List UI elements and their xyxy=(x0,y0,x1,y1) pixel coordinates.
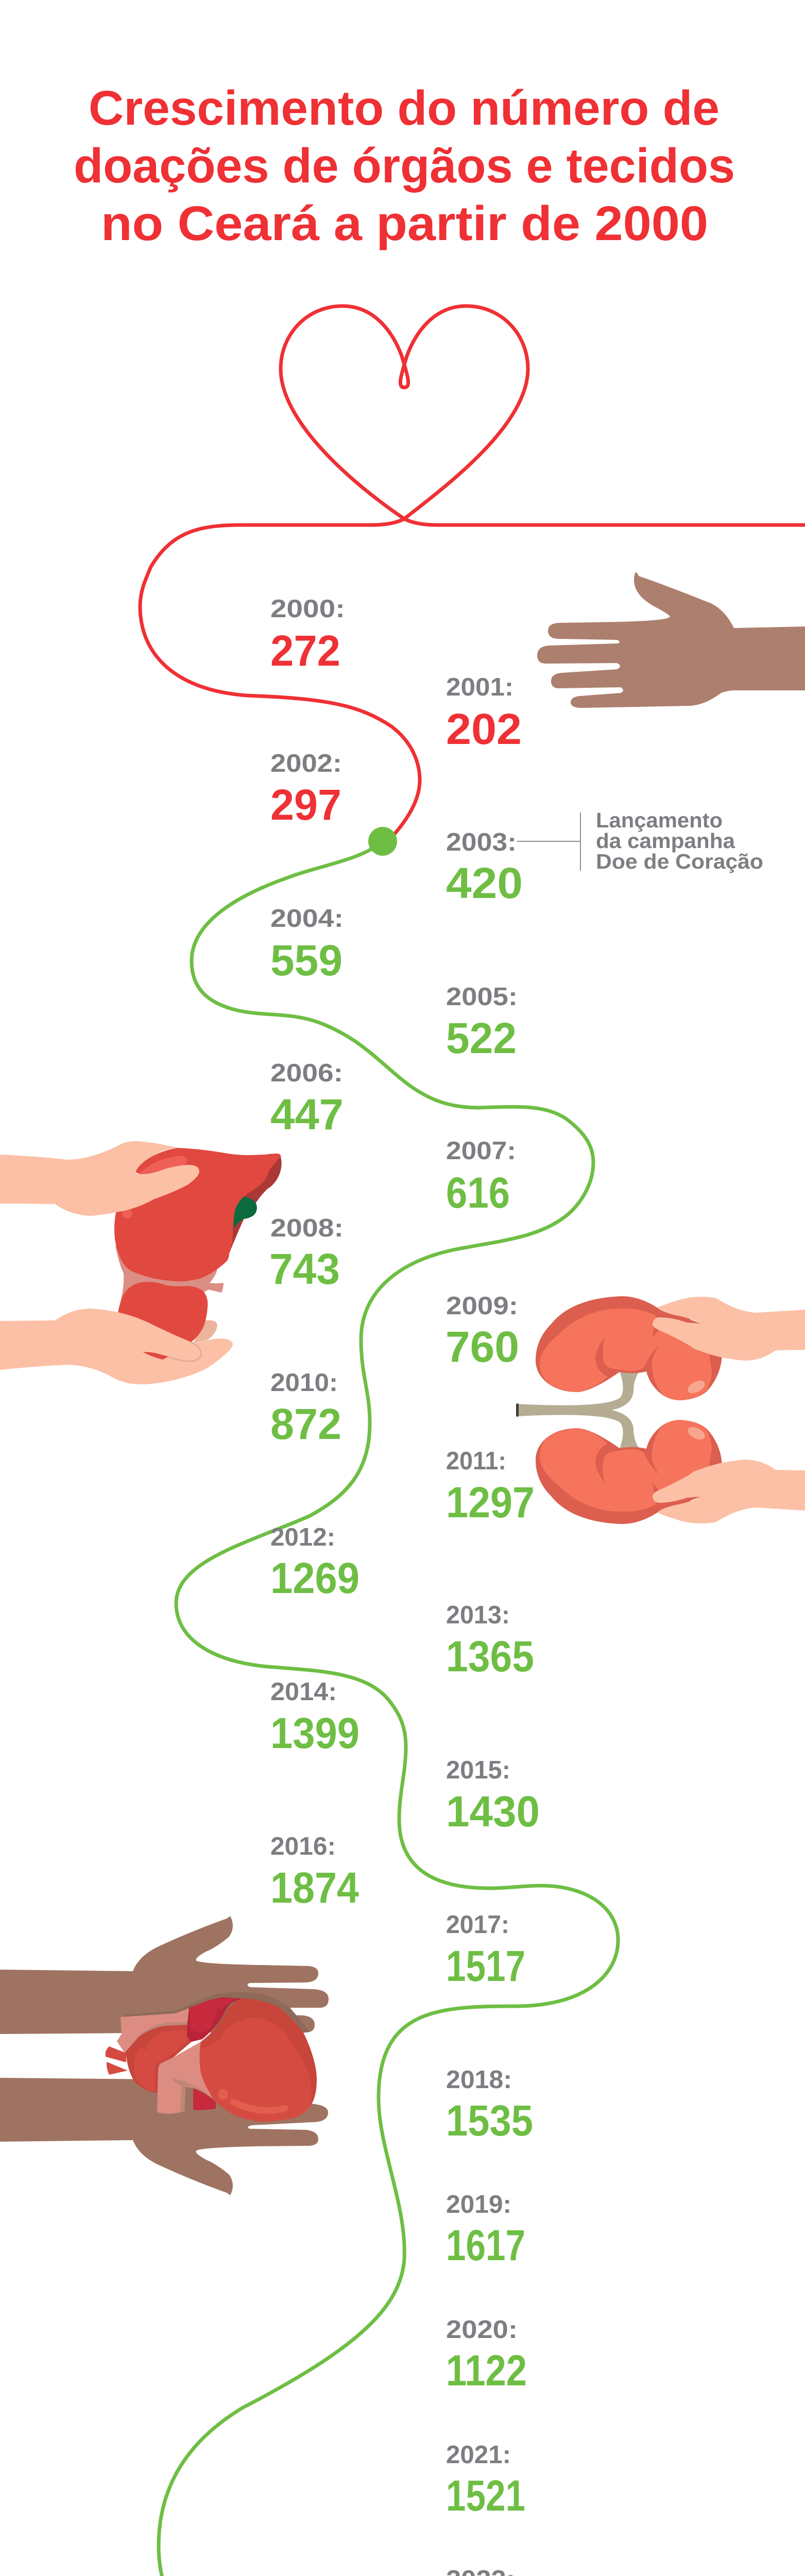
2007 xyxy=(446,1137,516,1217)
2017 xyxy=(446,1911,525,1990)
2016 xyxy=(270,1833,359,1912)
2011: 2011: xyxy=(446,1447,506,1475)
2010: 2010: xyxy=(270,1369,338,1397)
heart organ xyxy=(106,1997,317,2122)
2020 xyxy=(446,2316,527,2395)
2010 xyxy=(270,1369,341,1448)
2004: 2004: xyxy=(270,905,344,933)
2017: 2017: xyxy=(446,1911,509,1939)
2011 xyxy=(446,1447,535,1527)
2007: 616 xyxy=(446,1168,510,1217)
red heart ribbon line xyxy=(140,306,805,835)
2005 xyxy=(446,983,518,1062)
2015: 1430 xyxy=(446,1787,540,1836)
2005: 522 xyxy=(446,1014,517,1062)
2003 xyxy=(446,828,523,907)
lower kidney xyxy=(536,1420,722,1524)
2016: 2016: xyxy=(270,1833,336,1860)
icon: hands holding kidneys xyxy=(516,1296,805,1524)
upper hand xyxy=(0,1916,329,2034)
callout: campanha Doe de Coração xyxy=(517,808,763,873)
lower hand xyxy=(653,1460,805,1523)
callout: campanha Doe de Coração: Lançamento xyxy=(596,808,723,832)
2015 xyxy=(446,1756,540,1836)
2013 xyxy=(446,1601,534,1681)
2021 xyxy=(446,2441,525,2520)
2009 xyxy=(446,1292,519,1371)
title: no Ceará a partir de 2000 xyxy=(101,196,708,251)
2003: 420 xyxy=(446,859,523,907)
2013: 2013: xyxy=(446,1601,510,1629)
2000: 272 xyxy=(270,626,340,675)
2004 xyxy=(270,905,344,985)
2012: 1269 xyxy=(270,1554,359,1602)
2000 xyxy=(270,595,345,675)
title: doações de órgãos e tecidos xyxy=(74,139,735,193)
icon: hands holding heart xyxy=(0,1916,329,2195)
icon: hands holding liver xyxy=(0,1141,282,1384)
2003: 2003: xyxy=(446,828,517,856)
2004: 559 xyxy=(270,936,342,985)
callout: campanha Doe de Coração: Doe de Coração xyxy=(596,850,763,873)
icon: open hand top right xyxy=(537,572,805,708)
2005: 2005: xyxy=(446,983,518,1011)
green dot: campaign start xyxy=(368,827,397,856)
title: Crescimento do número de xyxy=(89,81,720,135)
2016: 1874 xyxy=(270,1863,359,1912)
2008 xyxy=(269,1214,344,1293)
lower hand xyxy=(0,2078,328,2195)
2014: 2014: xyxy=(270,1678,337,1706)
2019 xyxy=(446,2191,525,2269)
2015: 2015: xyxy=(446,1756,510,1784)
title xyxy=(74,81,735,251)
2002: 2002: xyxy=(270,750,342,777)
2019: 2019: xyxy=(446,2191,511,2218)
2006: 447 xyxy=(270,1090,344,1139)
2017: 1517 xyxy=(446,1942,525,1990)
2018 xyxy=(446,2066,533,2145)
2007: 2007: xyxy=(446,1137,516,1165)
2013: 1365 xyxy=(446,1632,534,1681)
2021: 2021: xyxy=(446,2441,511,2469)
2019: 1617 xyxy=(446,2221,525,2269)
2012: 2012: xyxy=(270,1523,335,1551)
2002: 297 xyxy=(270,781,341,829)
2018: 2018: xyxy=(446,2066,512,2094)
callout: campanha Doe de Coração: da campanha xyxy=(596,829,735,853)
2008: 2008: xyxy=(270,1214,344,1242)
2001: 202 xyxy=(446,705,522,753)
2006 xyxy=(270,1059,344,1139)
upper hand xyxy=(653,1297,805,1361)
2008: 743 xyxy=(269,1245,340,1293)
2010: 872 xyxy=(270,1400,341,1448)
green timeline line xyxy=(159,841,618,2576)
2018: 1535 xyxy=(446,2096,533,2145)
2009: 760 xyxy=(446,1323,519,1371)
2009: 2009: xyxy=(446,1292,518,1320)
2014: 1399 xyxy=(270,1709,359,1757)
2021: 1521 xyxy=(446,2471,525,2520)
2006: 2006: xyxy=(270,1059,343,1087)
2014 xyxy=(270,1678,359,1757)
2000: 2000: xyxy=(270,595,345,623)
2020: 1122 xyxy=(446,2346,527,2395)
2001 xyxy=(446,673,522,753)
2012 xyxy=(270,1523,359,1602)
2001: 2001: xyxy=(446,673,513,701)
ureter tubes xyxy=(516,1371,639,1449)
2002 xyxy=(270,750,342,829)
upper kidney xyxy=(536,1296,722,1400)
2011: 1297 xyxy=(446,1478,535,1527)
hand shadow xyxy=(125,1992,309,2035)
2020: 2020: xyxy=(446,2316,518,2344)
